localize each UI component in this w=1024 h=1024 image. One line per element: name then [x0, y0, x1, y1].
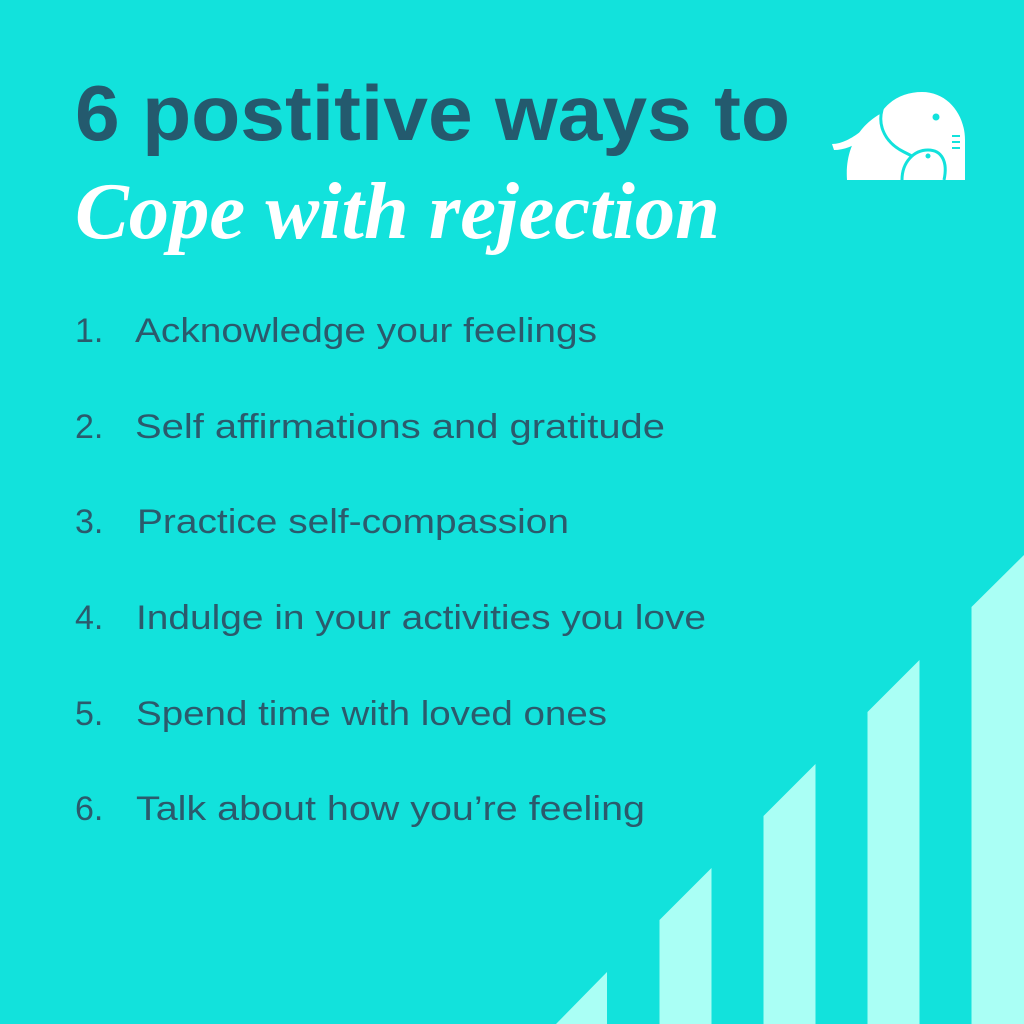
icon: elephant logo: [832, 92, 965, 180]
item 2: 2.: [75, 408, 103, 446]
item 6: 6.: [75, 790, 103, 828]
item 1: 1.: [75, 312, 103, 350]
item 3: Practice self-compassion: [137, 503, 569, 541]
item 1: Acknowledge your feelings: [135, 312, 597, 350]
item 2: Self affirmations and gratitude: [135, 408, 665, 446]
bar chart decoration: [556, 555, 1024, 1024]
item 4: 4.: [75, 599, 103, 637]
title: [75, 69, 790, 256]
item 5: Spend time with loved ones: [136, 695, 607, 733]
item 5: 5.: [75, 695, 103, 733]
title: Cope with rejection: [75, 168, 720, 256]
item 3: 3.: [75, 503, 103, 541]
item 6: Talk about how you’re feeling: [136, 790, 645, 828]
title: 6 postitive ways to: [75, 69, 790, 157]
list: coping strategies: [75, 312, 706, 828]
item 4: Indulge in your activities you love: [136, 599, 706, 637]
